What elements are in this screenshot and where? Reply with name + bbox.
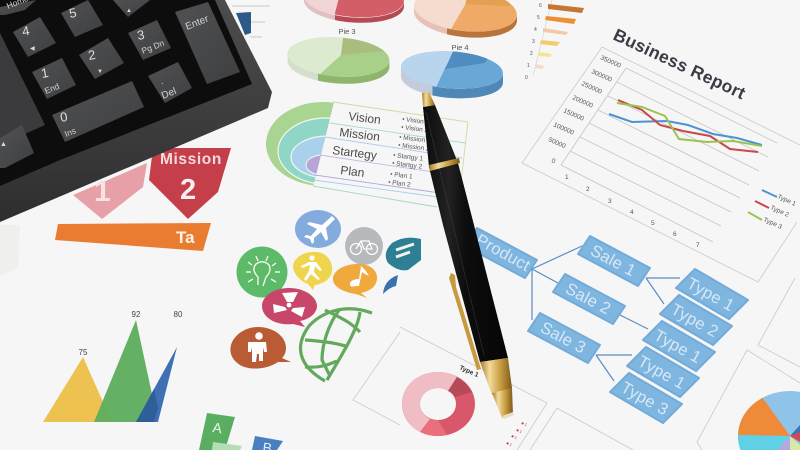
small bar chart: 2: [530, 51, 533, 57]
key: up arrow: ▲: [126, 8, 132, 14]
donut legend: ■ 1: [521, 420, 529, 428]
orange band: Ta: [176, 228, 195, 247]
donut chart: [402, 364, 529, 448]
y axis labels: 150000: [562, 107, 585, 123]
pie 3: [288, 37, 390, 84]
small bar chart: 3: [532, 39, 535, 45]
box: Type 1: Type 1: [684, 275, 737, 315]
pen clip: [449, 273, 481, 370]
pen tip: [492, 388, 513, 418]
key: 1 End: 1: [40, 65, 50, 81]
key: left arrow: [0, 125, 34, 168]
pen point: [502, 412, 514, 419]
key: 2: ▼: [97, 69, 103, 75]
icon: walking person: [293, 252, 332, 290]
y axis labels: 50000: [547, 136, 567, 150]
icon: blue fragment: [383, 275, 398, 294]
x axis labels: 5: [651, 220, 655, 227]
icon: radiation: [262, 288, 317, 327]
x axis labels: [565, 174, 700, 249]
row bullets: • Mission 1: [399, 134, 431, 145]
donut legend: [458, 364, 529, 448]
donut legend: ■ 1: [511, 433, 519, 441]
row bullets: • Startgy 1: [393, 152, 424, 163]
left table edge: [0, 225, 20, 276]
y axis labels: 0: [550, 157, 557, 165]
x axis labels: 4: [630, 209, 634, 216]
key: Del: Del: [160, 86, 178, 102]
keyboard: [0, 0, 272, 222]
row labels: Plan: [340, 163, 365, 180]
small bar chart: 6: [539, 3, 542, 9]
pen: [422, 92, 514, 419]
icon: plane: [295, 210, 341, 248]
line: type 3: [617, 103, 762, 146]
icon: teal vehicle fragment: [386, 238, 421, 270]
pen gold section: [480, 358, 512, 395]
pie 4: [401, 51, 503, 98]
y axis labels: 350000: [599, 54, 622, 70]
row bullets: [388, 116, 431, 189]
key: 3 Pg Dn: Pg Dn: [140, 38, 166, 56]
small bar chart: [525, 0, 584, 81]
small bar chart: 0: [525, 75, 528, 81]
pie chart bottom right: [738, 391, 800, 450]
donut legend: Type 1: [458, 364, 480, 379]
legend: Type 1: [776, 193, 797, 208]
triangle chart: 80: [174, 310, 183, 319]
x axis labels: 6: [673, 231, 677, 238]
x axis labels: 1: [565, 174, 569, 181]
icon: light bulb: [236, 246, 288, 298]
box: Type 1: [627, 347, 699, 397]
box: Type 2: [660, 295, 732, 345]
step 1 pentagon: [73, 163, 147, 219]
step 2 pentagon: Mission: Mission: [160, 151, 222, 168]
box: Product: Product: [473, 231, 533, 275]
row bullets: • Startgy 2: [392, 160, 423, 171]
small bar chart: 4: [534, 27, 537, 33]
key: Enter: Enter: [184, 13, 211, 33]
box: Sale 1: Sale 1: [587, 242, 639, 280]
x axis labels: 2: [586, 186, 590, 193]
row bullets: • Vision 2: [401, 124, 429, 134]
key: 2: 2: [87, 47, 97, 63]
box: Type 3: [610, 373, 682, 423]
legend: [748, 190, 797, 231]
x axis labels: 7: [696, 242, 700, 249]
keyboard body: [0, 0, 272, 222]
line: type 1: [609, 114, 762, 145]
x axis labels: 3: [608, 198, 612, 205]
title: Business Report: Business Report: [610, 24, 749, 103]
y axis labels: 250000: [580, 80, 603, 96]
vision mission strategy plan table: [266, 102, 468, 207]
icon: person: [230, 327, 291, 369]
box: Type 1: Type 1: [635, 353, 688, 393]
triangle chart: 75: [79, 348, 88, 357]
key: Enter: [175, 2, 240, 84]
row bullets: • Mission 2: [398, 142, 430, 153]
pen highlight: [426, 112, 484, 355]
box: Sale 3: Sale 3: [537, 319, 589, 357]
key: 1 End: [32, 58, 76, 99]
pie 2: [410, 0, 520, 38]
key: 5: [61, 0, 103, 37]
pie 3 label: Pie 3: [338, 27, 356, 36]
key: 4: [13, 17, 56, 57]
step 2 pentagon: Mission: 2: [180, 174, 196, 206]
key: 2: [79, 38, 124, 79]
top-left report fragment: [232, 6, 270, 37]
row bullets: • Vision 1: [402, 116, 430, 126]
key: up arrow: [113, 0, 150, 17]
row labels: Mission: [339, 125, 381, 144]
small bar chart: 1: [527, 63, 530, 69]
y axis labels: [547, 54, 622, 165]
letter blocks: A: [212, 419, 224, 436]
key: 5: 5: [68, 5, 78, 21]
pen ring: [429, 158, 460, 171]
triangle chart: [43, 310, 183, 422]
icon: music note: [333, 264, 377, 298]
y axis labels: 100000: [552, 121, 575, 137]
key: 3 Pg Dn: 3: [136, 27, 146, 43]
triangle chart: 92: [132, 310, 141, 319]
box: Type 3: Type 3: [618, 379, 671, 419]
row labels: [332, 109, 382, 180]
pie 4 label: Pie 4: [451, 43, 469, 52]
box: Type 1: [643, 321, 715, 371]
pie 1: [304, 0, 404, 23]
key: 3 Pg Dn: [128, 20, 171, 60]
legend: Type 2: [769, 204, 790, 219]
icon: globe: [301, 309, 372, 381]
step 1 pentagon: 1: [94, 175, 111, 208]
step 2 pentagon: Mission: [149, 148, 231, 219]
box: Sale 1: [578, 236, 650, 286]
orange band: [55, 223, 211, 251]
y axis labels: 300000: [590, 68, 613, 84]
key well: [0, 0, 252, 186]
key: Del: .: [161, 76, 164, 86]
pen barrel: [423, 105, 508, 362]
key: 1 End: End: [43, 81, 61, 96]
row bullets: • Plan 2: [388, 179, 411, 189]
key: Home: [0, 0, 36, 15]
key: 0 Ins: 0: [59, 109, 69, 125]
key: Del: [148, 62, 192, 103]
concentric arcs: [266, 102, 334, 186]
line: type 2: [618, 100, 758, 152]
table lines: [313, 102, 468, 207]
box: Type 1: [676, 269, 748, 319]
box: Type 2: Type 2: [668, 301, 721, 341]
key: left arrow: ▲: [0, 141, 7, 148]
donut legend: ■ 1: [506, 440, 514, 448]
row bullets: • Plan 1: [390, 171, 413, 181]
donut legend: ■ 1: [516, 427, 524, 435]
box: Sale 3: [528, 313, 600, 363]
line chart: [547, 54, 797, 249]
letter blocks: [199, 413, 283, 450]
key: 4: ◀: [30, 46, 35, 52]
key: 4: 4: [21, 23, 31, 39]
key: 0 Ins: Ins: [63, 125, 77, 139]
icon: bicycle: [345, 227, 383, 265]
row labels: Startegy: [332, 143, 378, 162]
box: Sale 2: Sale 2: [562, 280, 614, 318]
side panel: [0, 33, 45, 145]
key: 0 Ins: [52, 81, 144, 142]
box: Type 1: Type 1: [651, 327, 704, 367]
pen top cone: [422, 92, 435, 107]
flow chart connectors: [532, 246, 680, 381]
row labels: Vision: [348, 109, 382, 127]
small bar chart: 5: [537, 15, 540, 21]
paper sheet outlines: [353, 47, 800, 450]
legend: Type 3: [762, 216, 783, 231]
y axis labels: 200000: [571, 94, 594, 110]
box: Sale 2: [553, 274, 625, 324]
